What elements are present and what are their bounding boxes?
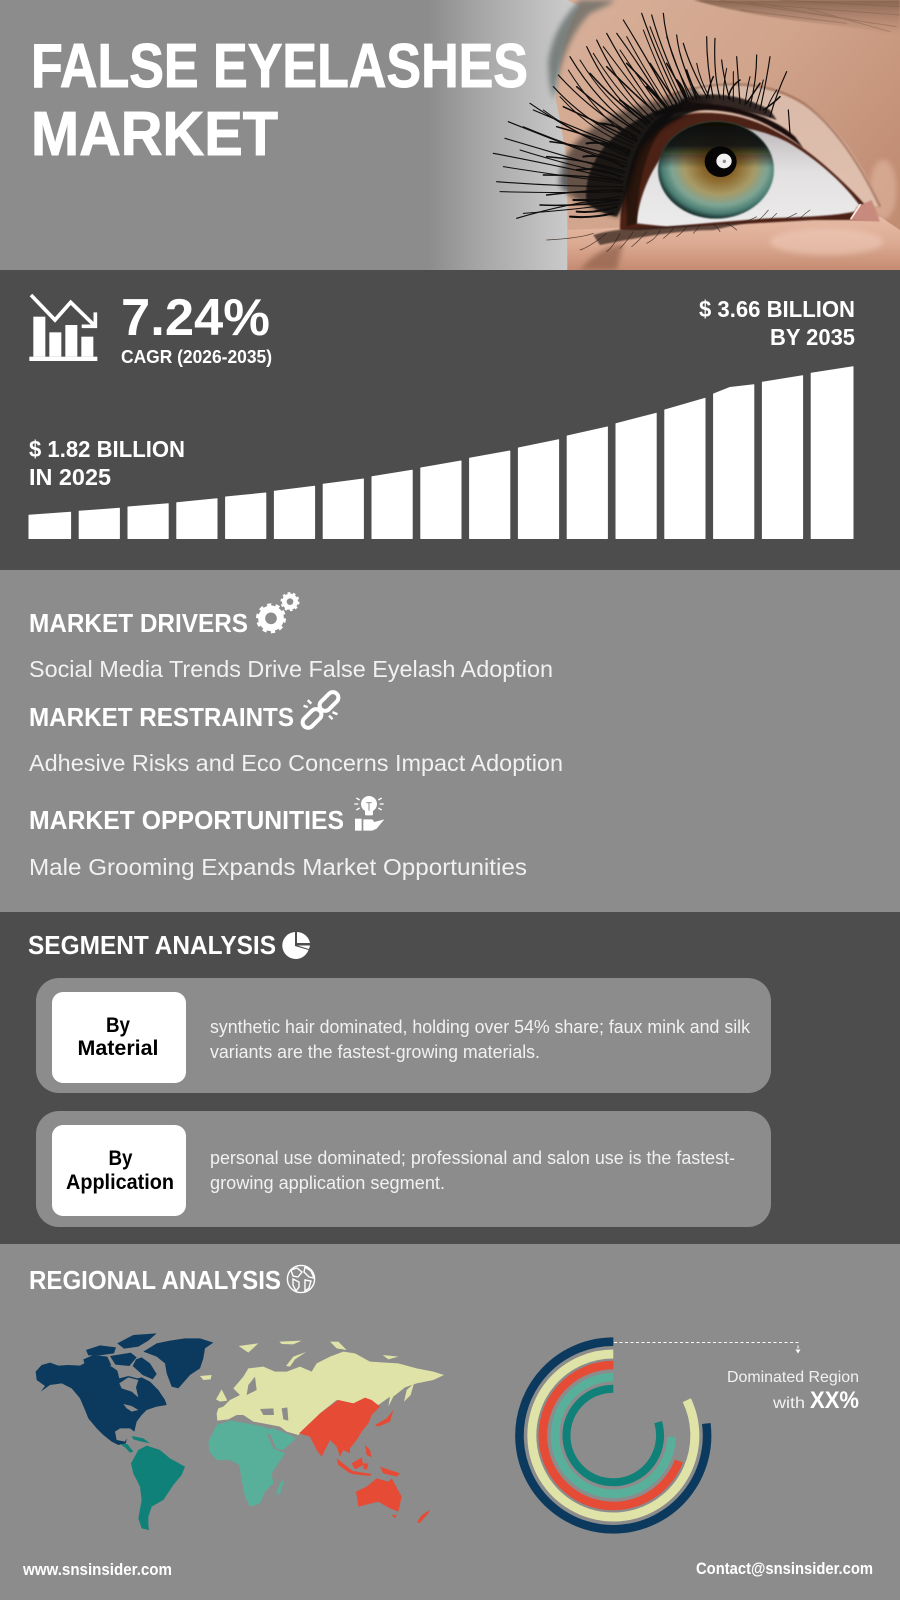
heading: market opportunities: MARKET OPPORTUNITIES <box>29 805 344 835</box>
chart: radial bars <box>519 1342 707 1529</box>
region: Europe and Russia <box>200 1341 444 1435</box>
region: Asia Pacific <box>299 1398 430 1523</box>
world map <box>36 1333 444 1530</box>
2035 value <box>699 296 855 350</box>
footer: contact: Contact@snsinsider.com <box>696 1559 873 1578</box>
icon: pie chart <box>282 932 310 959</box>
text: opportunity: Male Grooming Expands Market Opportunities <box>29 854 527 880</box>
callout: dominated region: with <box>772 1395 805 1412</box>
panel: header <box>0 0 900 270</box>
card: by application <box>36 1111 771 1227</box>
heading: market drivers: MARKET DRIVERS <box>29 608 248 638</box>
text: driver: Social Media Trends Drive False Eyelash Adoption <box>29 656 553 682</box>
label box: by application: By <box>108 1147 133 1170</box>
label box: by material: By <box>106 1014 130 1037</box>
icon: broken chain <box>293 682 347 737</box>
icon: globe <box>287 1265 315 1293</box>
text: material finding: variants are the fastest-growing materials. <box>210 1042 540 1062</box>
region: North America <box>36 1333 213 1445</box>
footer: website: www.snsinsider.com <box>22 1560 172 1579</box>
panel: regional analysis <box>22 1265 873 1579</box>
panel: drivers, restraints, opportunities <box>29 593 563 880</box>
text: restraint: Adhesive Risks and Eco Concerns Impact Adoption <box>29 750 563 776</box>
callout: dominated region: XX% <box>810 1387 859 1414</box>
icon: bulb in hand <box>354 796 384 831</box>
label box: by application <box>52 1125 186 1216</box>
icon: gears <box>258 593 298 632</box>
heading: market restraints: MARKET RESTRAINTS <box>29 702 294 732</box>
2035 value: $ 3.66 BILLION <box>699 296 855 322</box>
title: FALSE EYELASHES <box>31 32 528 101</box>
text: material finding: synthetic hair dominated, holding over 54% share; faux mink and silk <box>210 1017 751 1037</box>
callout arrow: dashed connector <box>614 1342 800 1354</box>
CAGR value: 7.24% <box>121 289 270 347</box>
label box: by material <box>52 992 186 1083</box>
label box: by material: Material <box>78 1037 158 1060</box>
region: South America <box>120 1436 185 1530</box>
heading: segment analysis: SEGMENT ANALYSIS <box>28 930 276 960</box>
2025 value: $ 1.82 BILLION <box>29 436 185 462</box>
text: material finding <box>210 1017 751 1062</box>
text: application finding <box>210 1148 735 1193</box>
callout: dominated region: Dominated Region <box>727 1369 859 1386</box>
title <box>34 43 526 156</box>
bar chart: growth 2025 to 2035 <box>29 367 853 538</box>
2025 value <box>29 436 185 490</box>
panel: market size <box>0 270 900 570</box>
text: application finding: growing application segment. <box>210 1173 445 1193</box>
card: by material <box>36 978 771 1093</box>
photo: eye with false lashes <box>493 0 900 270</box>
heading: regional analysis: REGIONAL ANALYSIS <box>29 1265 281 1295</box>
2025 value: IN 2025 <box>29 464 111 490</box>
title: MARKET <box>31 100 278 169</box>
callout: dominated region <box>727 1369 859 1414</box>
CAGR label: CAGR (2026-2035) <box>121 347 272 367</box>
icon: declining chart <box>29 295 97 361</box>
2035 value: BY 2035 <box>770 324 855 350</box>
label box: by application: Application <box>66 1171 174 1194</box>
text: application finding: personal use dominated; professional and salon use is the fastest- <box>210 1148 735 1168</box>
region: Africa and Middle East <box>208 1421 296 1507</box>
panel: segment analysis <box>0 912 900 1244</box>
